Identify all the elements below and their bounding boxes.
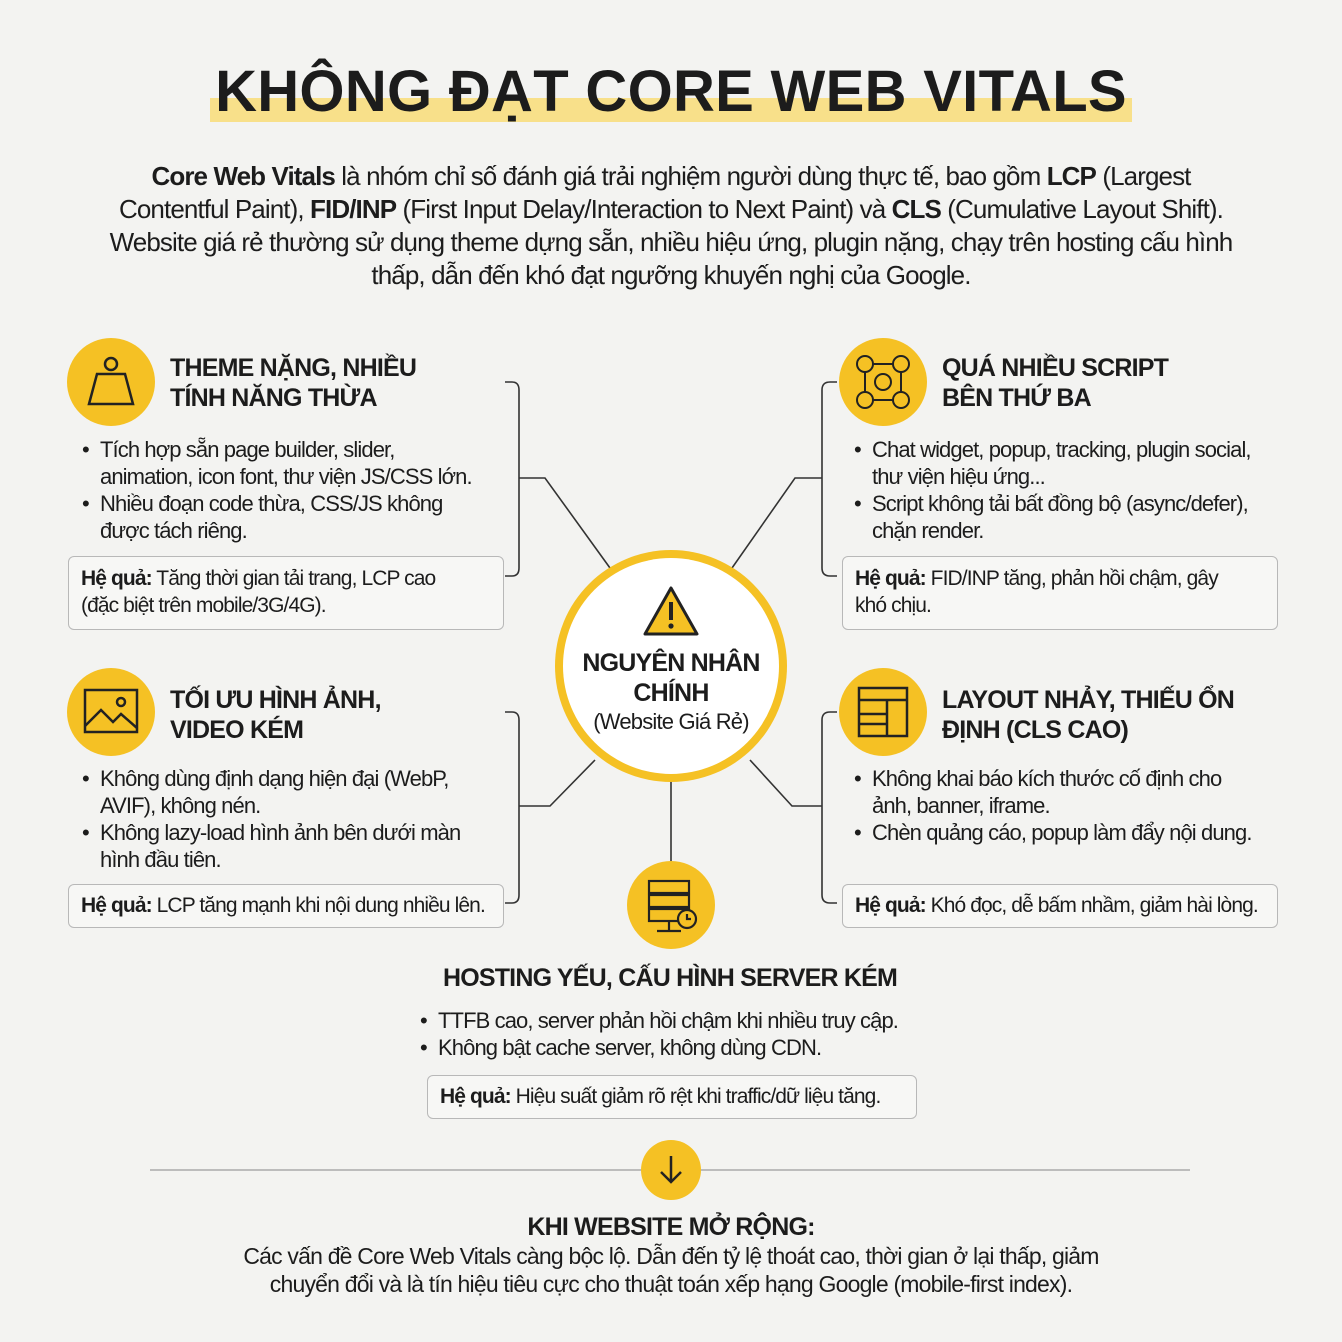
heading [170, 685, 381, 744]
icon: weight [67, 338, 155, 426]
bullets: Không khai báo kích thước cố định cho [872, 766, 1221, 791]
title: KHÔNG ĐẠT CORE WEB VITALS [215, 59, 1127, 124]
callout: Hệ quả: LCP tăng mạnh khi nội dung nhiều lên. [81, 894, 485, 917]
callout: Hệ quả: Tăng thời gian tải trang, LCP cao [81, 567, 435, 590]
intro text [110, 161, 1232, 290]
heading [942, 354, 1169, 412]
conclusion: KHI WEBSITE MỞ RỘNG: [527, 1213, 815, 1241]
callout [427, 1075, 917, 1119]
bullets: chặn render. [872, 518, 984, 543]
heading: LAYOUT NHẢY, THIẾU ỔN [942, 686, 1234, 714]
callout: (đặc biệt trên mobile/3G/4G). [81, 594, 326, 617]
bullets: Chat widget, popup, tracking, plugin social, [872, 437, 1251, 462]
bullets: Tích hợp sẵn page builder, slider, [100, 437, 394, 462]
bullets [82, 437, 472, 543]
callout [68, 884, 504, 928]
callout [842, 556, 1278, 630]
callout: Hệ quả: Hiệu suất giảm rõ rệt khi traffic/dữ liệu tăng. [440, 1085, 880, 1108]
heading: TỐI ƯU HÌNH ẢNH, [170, 686, 381, 714]
bullets: Chèn quảng cáo, popup làm đẩy nội dung. [872, 820, 1252, 845]
callout [68, 556, 504, 630]
bullets: Không dùng định dạng hiện đại (WebP, [100, 766, 448, 791]
intro text: thấp, dẫn đến khó đạt ngưỡng khuyến nghị của Google. [371, 260, 971, 290]
icon: arrow down [641, 1140, 701, 1200]
icon: server [627, 861, 715, 949]
heading: HOSTING YẾU, CẤU HÌNH SERVER KÉM [443, 964, 897, 992]
bullets: animation, icon font, thư viện JS/CSS lớn. [100, 464, 472, 489]
heading: VIDEO KÉM [170, 716, 303, 744]
panel: script [839, 338, 1278, 630]
heading [942, 685, 1234, 744]
icon: image [67, 668, 155, 756]
callout: Hệ quả: Khó đọc, dễ bấm nhầm, giảm hài lòng. [855, 894, 1258, 917]
center text: NGUYÊN NHÂN [582, 649, 760, 677]
intro text: Contentful Paint), FID/INP (First Input Delay/Interaction to Next Paint) và CLS (Cumulative Layout Shift). [119, 194, 1223, 224]
center text: CHÍNH [633, 679, 709, 707]
intro text: Website giá rẻ thường sử dụng theme dựng sẵn, nhiều hiệu ứng, plugin nặng, chạy trên hosting cấu hình [110, 227, 1232, 257]
callout: khó chịu. [855, 594, 931, 617]
center circle [555, 550, 787, 782]
center text [582, 648, 760, 734]
icon: code [839, 338, 927, 426]
bullets: thư viện hiệu ứng... [872, 464, 1045, 489]
heading: TÍNH NĂNG THỪA [170, 384, 377, 412]
bullets [854, 437, 1251, 543]
heading: THEME NẶNG, NHIỀU [170, 354, 416, 382]
conclusion: chuyển đổi và là tín hiệu tiêu cực cho thuật toán xếp hạng Google (mobile-first index). [270, 1271, 1072, 1297]
bullets: AVIF), không nén. [100, 793, 260, 818]
bullets [82, 766, 460, 872]
panel: hosting [420, 861, 917, 1119]
bullets: Nhiều đoạn code thừa, CSS/JS không [100, 491, 442, 516]
bullets: Không lazy-load hình ảnh bên dưới màn [100, 820, 460, 845]
conclusion: Các vấn đề Core Web Vitals càng bộc lộ. Dẫn đến tỷ lệ thoát cao, thời gian ở lại thấp, giảm [243, 1243, 1099, 1269]
heading: QUÁ NHIỀU SCRIPT [942, 354, 1168, 382]
panel: theme nặng [67, 338, 504, 630]
bullets: được tách riêng. [100, 518, 247, 543]
panel: layout [839, 668, 1278, 928]
bullets: ảnh, banner, iframe. [872, 793, 1050, 818]
bullets: TTFB cao, server phản hồi chậm khi nhiều truy cập. [438, 1008, 898, 1033]
bullets [420, 1008, 898, 1060]
icon: layout [839, 668, 927, 756]
callout: Hệ quả: FID/INP tăng, phản hồi chậm, gây [855, 567, 1218, 590]
intro text: Core Web Vitals là nhóm chỉ số đánh giá trải nghiệm người dùng thực tế, bao gồm LCP (Largest [151, 161, 1191, 191]
panel: hình ảnh [67, 668, 504, 928]
callout [842, 884, 1278, 928]
bullets: hình đầu tiên. [100, 847, 221, 872]
bullets: Không bật cache server, không dùng CDN. [438, 1035, 821, 1060]
conclusion [243, 1212, 1099, 1297]
heading [170, 354, 416, 412]
heading: ĐỊNH (CLS CAO) [942, 716, 1128, 744]
icon: warning [644, 586, 699, 636]
heading: BÊN THỨ BA [942, 384, 1091, 412]
center text: (Website Giá Rẻ) [593, 709, 749, 734]
bullets [854, 766, 1252, 845]
bullets: Script không tải bất đồng bộ (async/defer), [872, 491, 1248, 516]
